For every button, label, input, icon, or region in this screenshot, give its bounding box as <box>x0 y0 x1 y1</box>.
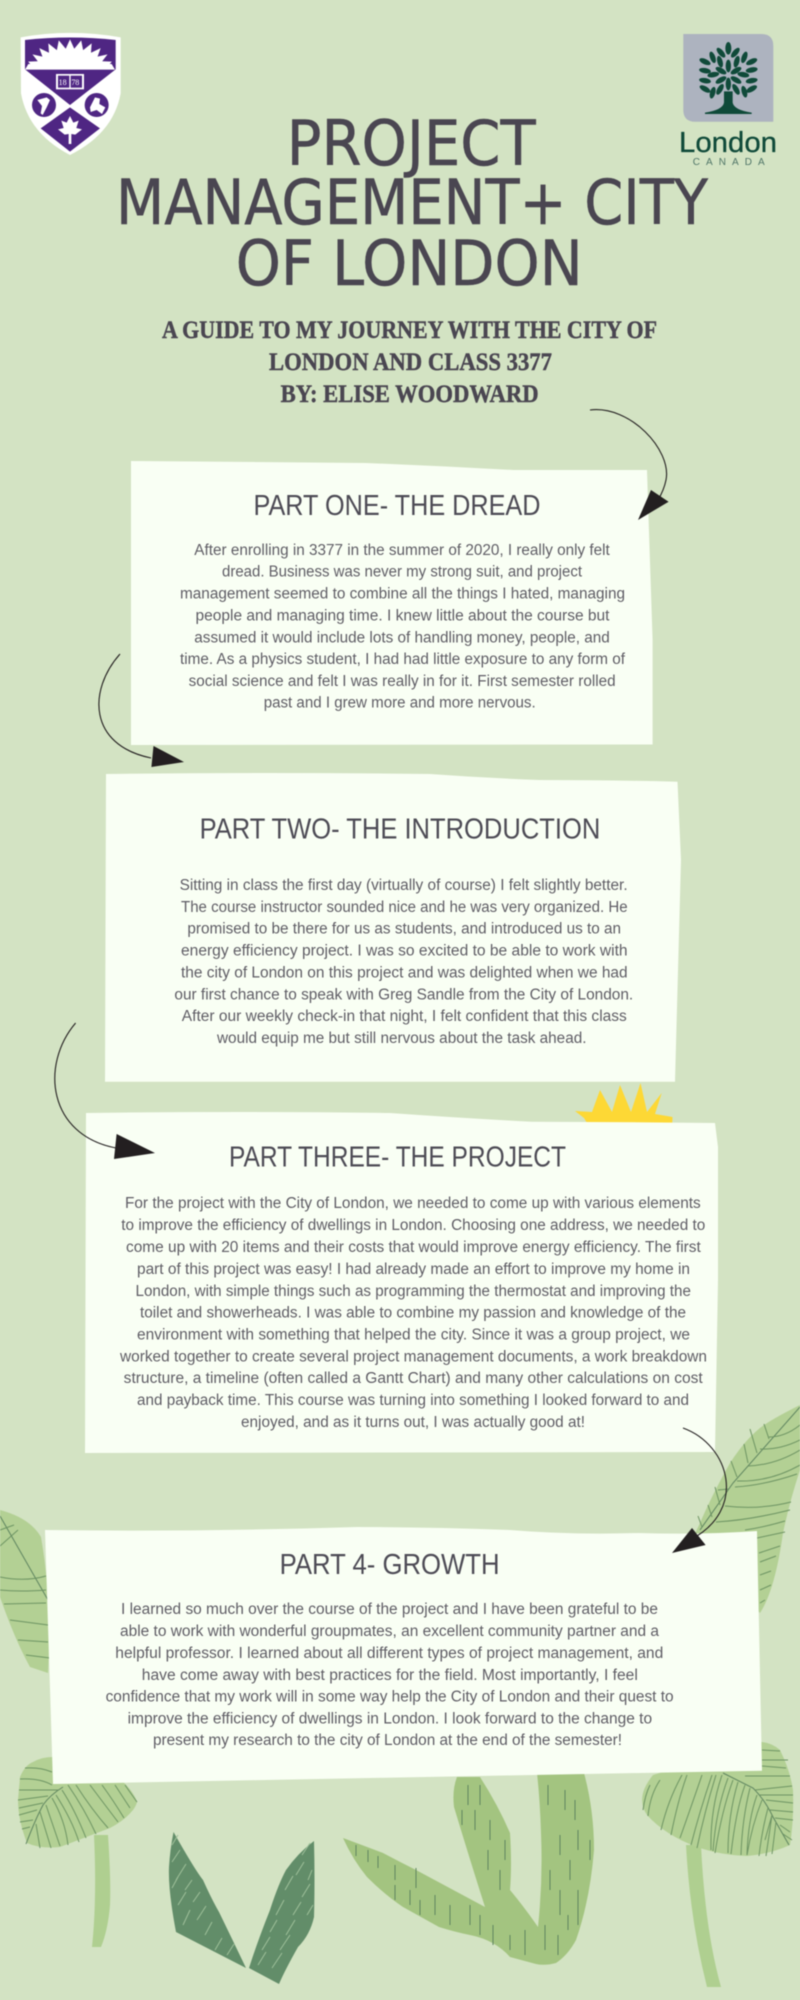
text: part three: enjoyed, and as it turns out, I was actually good at! <box>241 1414 585 1431</box>
text: part three: environment with something that helped the city. Since it was a group project, we <box>137 1326 690 1344</box>
arrow: part two to part three <box>55 1023 155 1159</box>
title: OF LONDON <box>236 227 583 300</box>
text: part one: After enrolling in 3377 in the summer of 2020, I really only felt <box>194 542 610 559</box>
panel: part four <box>45 1527 762 1784</box>
text: part four: improve the efficiency of dwellings in London. I look forward to the change to <box>128 1710 652 1728</box>
icon: City of London logo: CANADA <box>693 157 765 168</box>
text: part four: helpful professor. I learned about all different types of project management, and <box>115 1645 663 1662</box>
panel: part three <box>85 1112 718 1453</box>
text: part two: energy efficiency project. I was so excited to be able to work with <box>181 943 628 960</box>
subtitle <box>162 317 657 408</box>
arrow: part three to part four <box>672 1428 726 1553</box>
heading: part three: PART THREE- THE PROJECT <box>229 1142 566 1174</box>
decoration: left round leaf with stem <box>18 1757 137 1947</box>
title <box>116 107 708 300</box>
text: part three <box>119 1195 707 1431</box>
text: part three: toilet and showerheads. I was able to combine my passion and knowledge of the <box>140 1304 686 1322</box>
subtitle: A GUIDE TO MY JOURNEY WITH THE CITY OF <box>162 317 657 344</box>
text: part four: confidence that my work will in some way help the City of London and their quest to <box>106 1688 674 1706</box>
text: part two: The course instructor sounded nice and he was very organized. He <box>181 899 628 916</box>
panel: part one <box>131 461 653 745</box>
text: part three: structure, a timeline (often called a Gantt Chart) and many other calculations on cost <box>124 1370 703 1387</box>
title: PROJECT <box>287 107 537 180</box>
heading: part two: PART TWO- THE INTRODUCTION <box>200 814 600 846</box>
text: part one: people and managing time. I knew little about the course but <box>196 607 610 624</box>
text: part three: London, with simple things such as programming the thermostat and improving the <box>136 1283 691 1300</box>
text: part one <box>180 542 626 712</box>
subtitle: LONDON AND CLASS 3377 <box>269 349 552 376</box>
decoration: light green plant <box>343 1773 594 1965</box>
heading: part one: PART ONE- THE DREAD <box>254 490 540 522</box>
icon: Western University shield: 18 <box>59 78 67 87</box>
icon: Western University shield <box>21 33 121 155</box>
text: part one: past and I grew more and more nervous. <box>264 695 536 712</box>
text: part three: part of this project was easy! I had already made an effort to improve my home in <box>137 1261 690 1278</box>
arrow: part one to part two <box>99 654 184 767</box>
text: part three: and payback time. This course was turning into something I looked forward to and <box>137 1392 689 1409</box>
decoration: upper left leaf <box>0 1510 50 1673</box>
text: part two: the city of London on this project and was delighted when we had <box>181 964 628 982</box>
text: part three: For the project with the City of London, we needed to come up with various elements <box>125 1195 701 1212</box>
text: part two: promised to be there for us as students, and introduced us to an <box>187 921 621 938</box>
text: part one: assumed it would include lots of handling money, people, and <box>194 629 610 646</box>
text: part four <box>106 1601 674 1749</box>
text: part three: come up with 20 items and their costs that would improve energy efficiency. The first <box>126 1239 701 1256</box>
arrow: title to part one <box>590 410 669 520</box>
text: part four: able to work with wonderful groupmates, an excellent community partner and a <box>120 1623 659 1640</box>
text: part two: After our weekly check-in that night, I felt confident that this class <box>182 1008 627 1025</box>
text: part one: dread. Business was never my strong suit, and project <box>222 564 583 581</box>
text: part two: Sitting in class the first day (virtually of course) I felt slightly better. <box>180 877 628 894</box>
text: part two: our first chance to speak with Greg Sandle from the City of London. <box>174 986 633 1003</box>
icon: City of London logo: London <box>679 127 777 159</box>
decoration: upper right leaf <box>692 1405 800 1613</box>
text: part one: social science and felt I was really in for it. First semester rolled <box>189 673 616 690</box>
title: MANAGEMENT+ CITY <box>116 166 708 239</box>
panel: part two <box>105 773 681 1082</box>
text: part four: have come away with best practices for the field. Most importantly, I feel <box>142 1667 638 1684</box>
icon: City of London logo <box>679 34 777 168</box>
decoration: dark green leaves <box>169 1832 314 1984</box>
subtitle: BY: ELISE WOODWARD <box>281 381 539 408</box>
text: part one: management seemed to combine all the things I hated, managing <box>180 586 625 603</box>
text: part four: I learned so much over the course of the project and I have been grateful to be <box>121 1601 658 1618</box>
decoration: right round leaf with stem <box>642 1742 793 1987</box>
heading: part four: PART 4- GROWTH <box>280 1549 500 1581</box>
text: part one: time. As a physics student, I had had little exposure to any form of <box>180 651 626 668</box>
text: part two: would equip me but still nervous about the task ahead. <box>216 1030 586 1047</box>
text: part four: present my research to the city of London at the end of the semester! <box>153 1732 622 1749</box>
icon: Western University shield: 78 <box>71 78 79 87</box>
icon: sun <box>575 1083 672 1128</box>
text: part three: worked together to create several project management documents, a work breakdown <box>119 1348 707 1366</box>
text: part two <box>174 877 633 1047</box>
text: part three: to improve the efficiency of dwellings in London. Choosing one address, we needed to <box>121 1217 705 1234</box>
